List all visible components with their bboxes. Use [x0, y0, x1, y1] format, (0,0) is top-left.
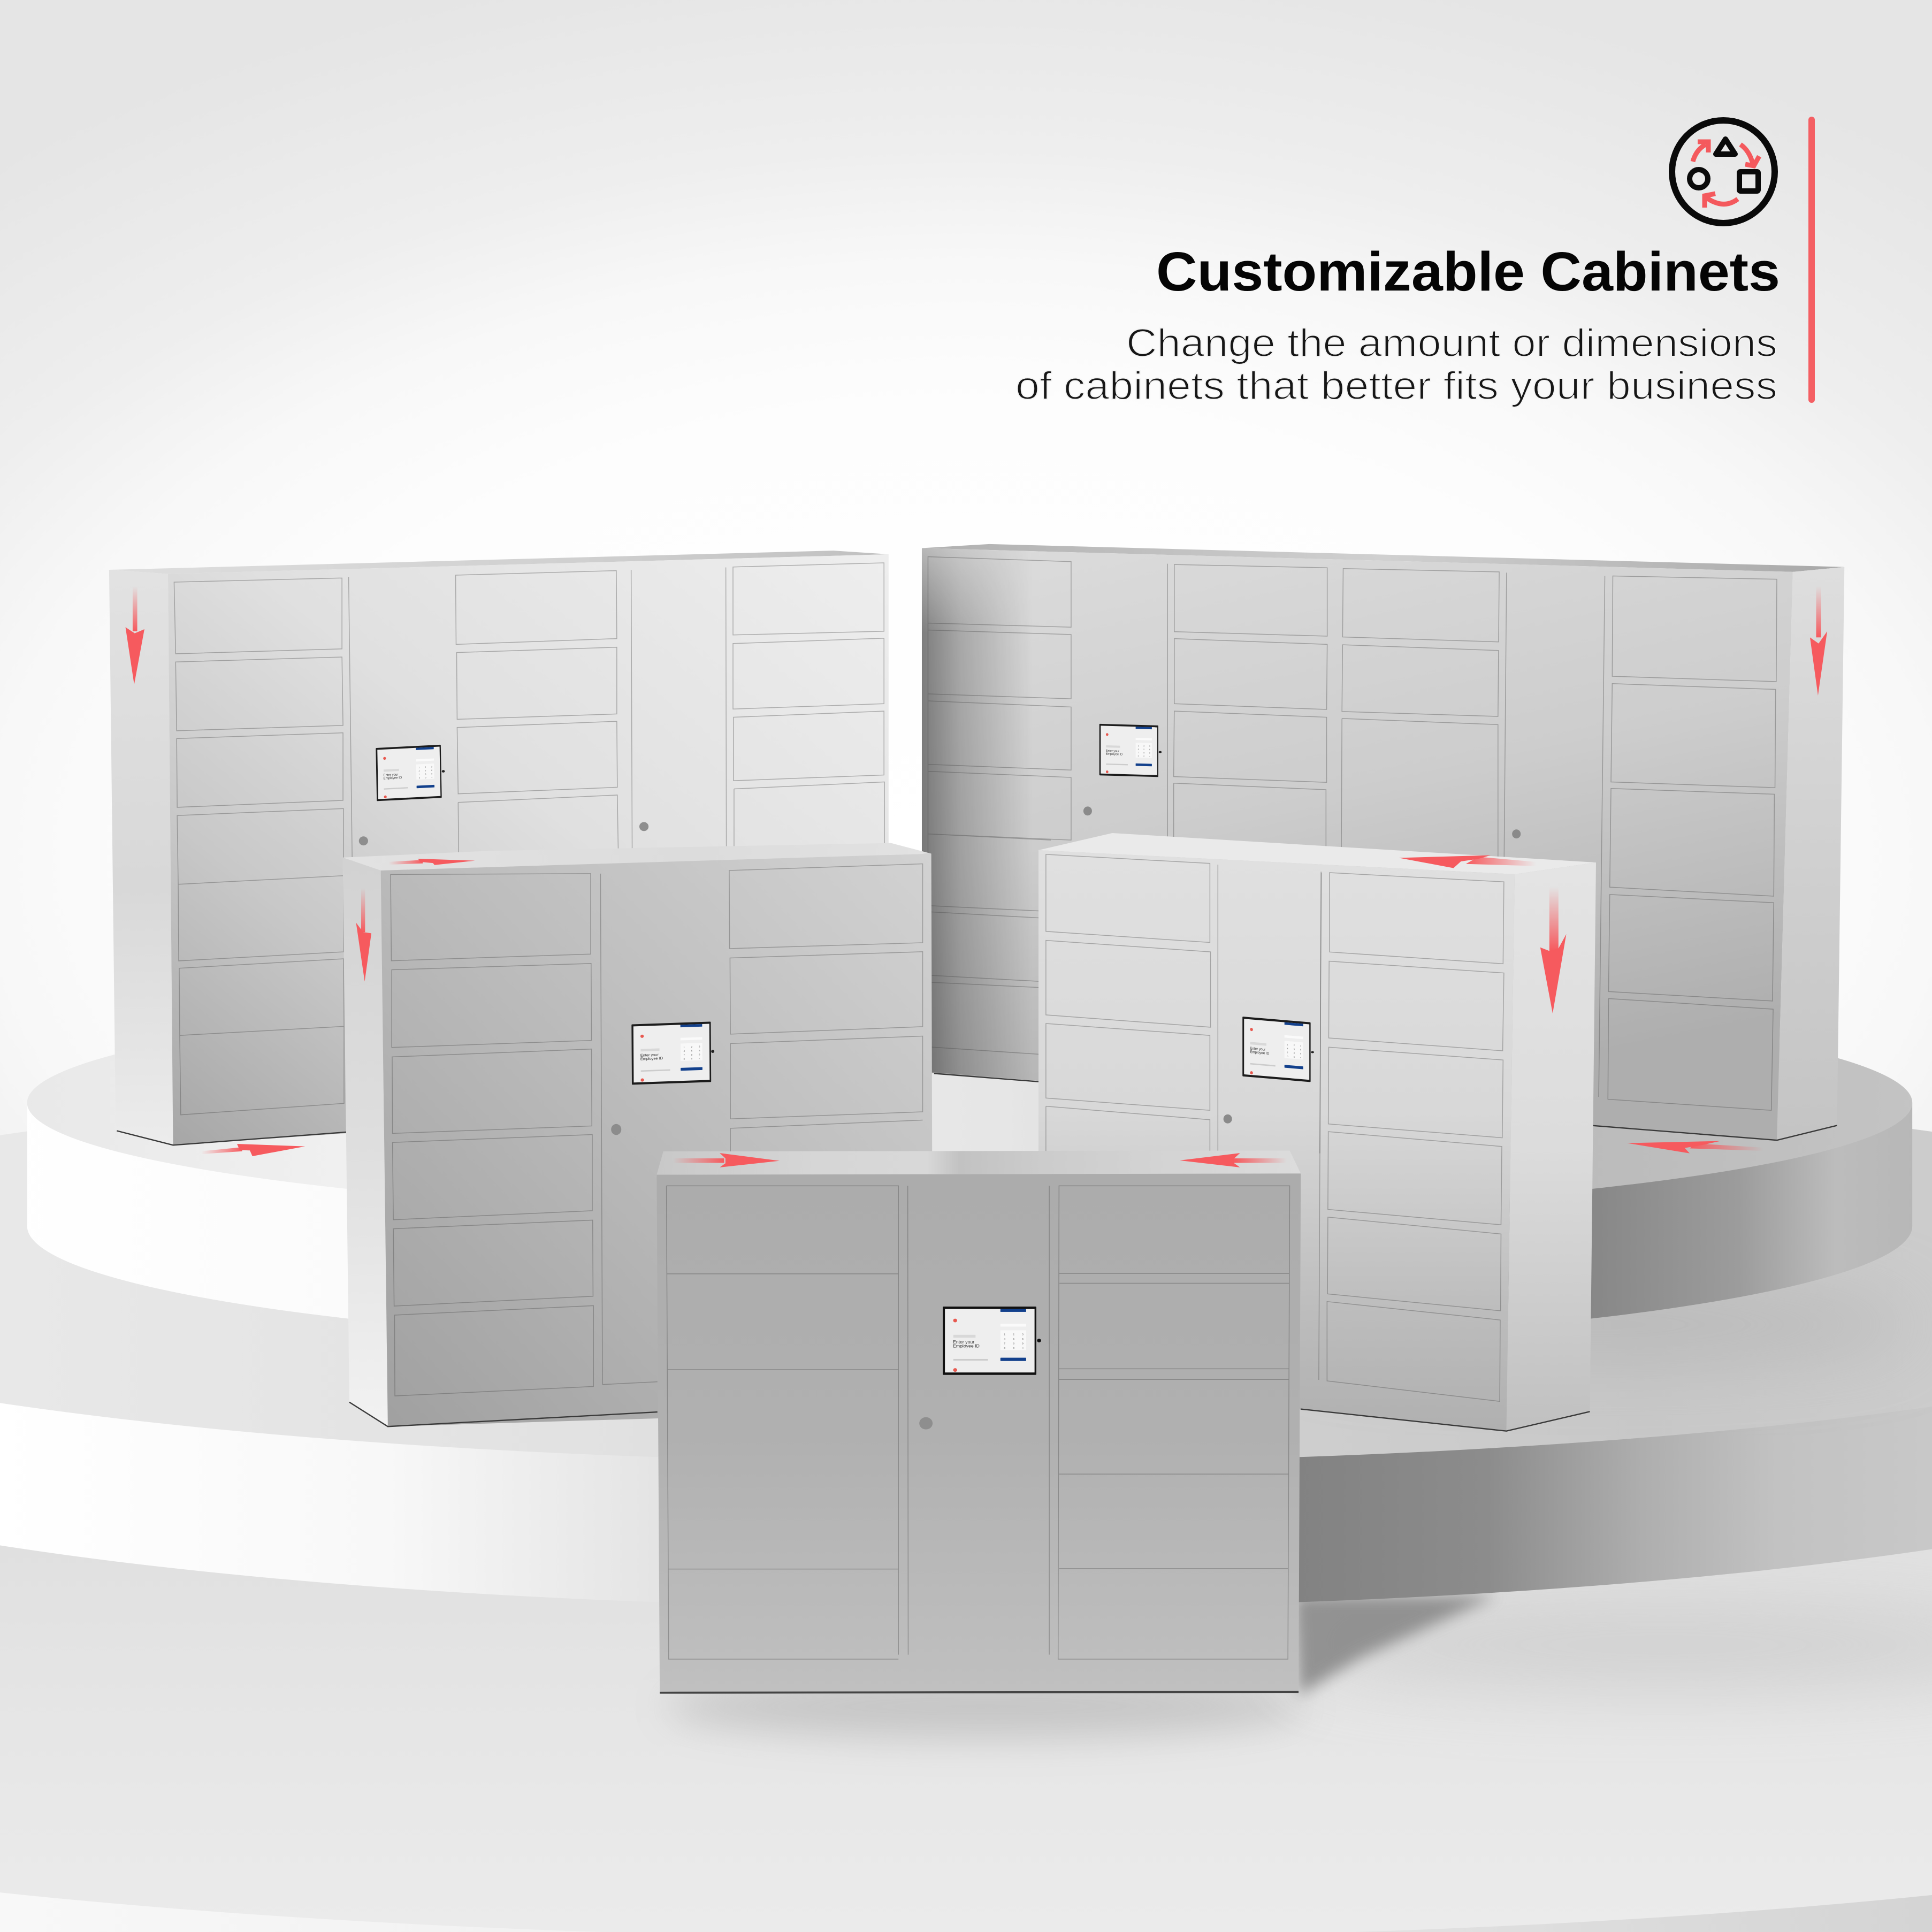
body text: of cabinets that better fits your business	[1015, 364, 1777, 408]
screen: middle left: 7 8 9	[684, 1053, 700, 1056]
screen: middle right: 1 2 3	[1287, 1044, 1301, 1047]
body text	[1015, 322, 1777, 408]
screen: back left: 1 2 3	[419, 766, 432, 769]
back left front face	[168, 554, 889, 1145]
heading: Customizable Cabinets	[1156, 241, 1780, 302]
back left contact line	[117, 1131, 347, 1145]
screen: back left: 7 8 9	[419, 773, 432, 776]
arrow: right below back left	[201, 1144, 305, 1156]
back right front face	[922, 548, 1793, 1140]
cabinet: front centre	[656, 1151, 1301, 1693]
screen: back left: Employee ID	[384, 776, 402, 781]
arrow: down on middle right side	[1540, 887, 1566, 1013]
front top face	[656, 1151, 1301, 1175]
middle right contact line	[1301, 1409, 1590, 1431]
arrow: down on middle left side	[356, 888, 371, 982]
icon ring	[1672, 120, 1775, 223]
arrow: left below back right	[1627, 1141, 1763, 1154]
back right contact line	[934, 1073, 1837, 1140]
screen: back right: 0 0 <	[1138, 755, 1150, 758]
front base contact line	[660, 1692, 1299, 1693]
screen: back left: Enter your	[383, 773, 398, 777]
front knob	[919, 1417, 933, 1430]
middle left lock dot	[711, 1050, 714, 1053]
screen: middle left: 4 5 6	[684, 1049, 700, 1052]
screen: middle left: 0 0 <	[684, 1057, 700, 1060]
screen: middle right: 0 0 <	[1287, 1056, 1302, 1059]
screen: middle right	[1242, 1017, 1311, 1082]
middle right locker outlines, left and door	[1046, 854, 1321, 1154]
screen: back left: 0 0 <	[419, 776, 432, 779]
back left knobs	[359, 822, 648, 845]
arrow: down on back left side	[126, 586, 144, 684]
floor shadows	[666, 1595, 1932, 1738]
middle left locker outlines	[391, 864, 923, 1396]
middle left front face	[381, 853, 933, 1426]
screen: front: Enter your	[953, 1339, 974, 1345]
middle right lock dot	[1311, 1051, 1314, 1053]
upper platform side	[27, 1103, 1912, 1349]
screen: middle left: Employee ID	[640, 1056, 663, 1062]
middle left knob	[611, 1124, 621, 1135]
screen: front	[943, 1307, 1036, 1375]
screen: back right: Enter your	[1106, 750, 1119, 753]
screen: front: Employee ID	[953, 1343, 980, 1348]
front locker outlines	[667, 1186, 1289, 1659]
back right locker outlines	[928, 557, 1777, 1110]
screen: back right: 7 8 9	[1138, 752, 1150, 754]
screen: middle left: 1 2 3	[684, 1045, 700, 1048]
front face	[656, 1173, 1301, 1693]
back right side face	[1777, 567, 1844, 1140]
back left lock dot	[442, 770, 445, 773]
front lock dot	[1037, 1339, 1041, 1342]
screen: back right: 4 5 6	[1138, 748, 1150, 751]
middle left top face	[343, 843, 931, 870]
icon square	[1739, 172, 1758, 191]
screen: back right	[1099, 724, 1158, 777]
outer ground below floor	[0, 1602, 1932, 1932]
screen: middle right: 4 5 6	[1287, 1048, 1301, 1051]
arrow: right on middle left top	[388, 859, 475, 865]
screen: front: 4 5 6	[1004, 1338, 1024, 1341]
cabinet: middle right	[1038, 833, 1596, 1431]
back right knobs	[1083, 806, 1521, 838]
accent bar	[1808, 117, 1815, 403]
lower platform side	[0, 1201, 1932, 1608]
screen: back left: 4 5 6	[419, 769, 432, 772]
cabinet: middle left	[343, 843, 933, 1426]
middle left side face	[343, 858, 388, 1426]
screen: front: 1 2 3	[1004, 1333, 1024, 1336]
back right cast shadow	[922, 548, 1020, 1080]
middle right front face	[1038, 850, 1515, 1431]
back right top face	[922, 544, 1844, 572]
screen: middle right: Enter your	[1250, 1047, 1266, 1052]
back left locker outlines	[174, 563, 884, 1115]
arrow: down on back right side	[1810, 586, 1827, 696]
icon circle	[1690, 170, 1708, 188]
shadow on lower platform	[1281, 1288, 1922, 1362]
middle right top face	[1038, 833, 1596, 874]
middle left contact line	[349, 1402, 658, 1426]
screen: front: 7 8 9	[1004, 1342, 1024, 1345]
icon red arrows	[1693, 142, 1759, 208]
arrow: left on middle right top	[1399, 856, 1536, 868]
middle right knob	[1224, 1114, 1232, 1124]
screen: back left	[376, 745, 442, 801]
screen: middle left: Enter your	[640, 1052, 659, 1058]
back right lock dot	[1159, 751, 1162, 753]
screen: back right: Employee ID	[1106, 753, 1122, 757]
screen: middle right: 7 8 9	[1287, 1051, 1301, 1055]
icon: shapes in rotating circle	[1672, 120, 1775, 223]
middle right locker outlines, right column	[1301, 856, 1590, 1431]
screen: back right: 1 2 3	[1138, 745, 1150, 747]
screen: front: 0 0 <	[1004, 1347, 1024, 1350]
arrow: right on front top	[673, 1153, 780, 1167]
lower platform top	[0, 1075, 1932, 1463]
middle right side face	[1507, 862, 1596, 1431]
screen: middle right: Employee ID	[1250, 1050, 1269, 1056]
stepped round platform	[0, 988, 1932, 1932]
back left top face	[109, 551, 889, 574]
back left side face	[109, 570, 173, 1145]
screen: middle left	[631, 1021, 711, 1085]
cabinet: back right	[922, 544, 1844, 1154]
upper platform top	[27, 988, 1912, 1217]
body text: Change the amount or dimensions	[1126, 322, 1777, 365]
icon triangle	[1716, 139, 1735, 154]
floor	[0, 1392, 1932, 1932]
cabinet: back left	[109, 551, 889, 1156]
arrow: left on front top	[1180, 1153, 1287, 1167]
